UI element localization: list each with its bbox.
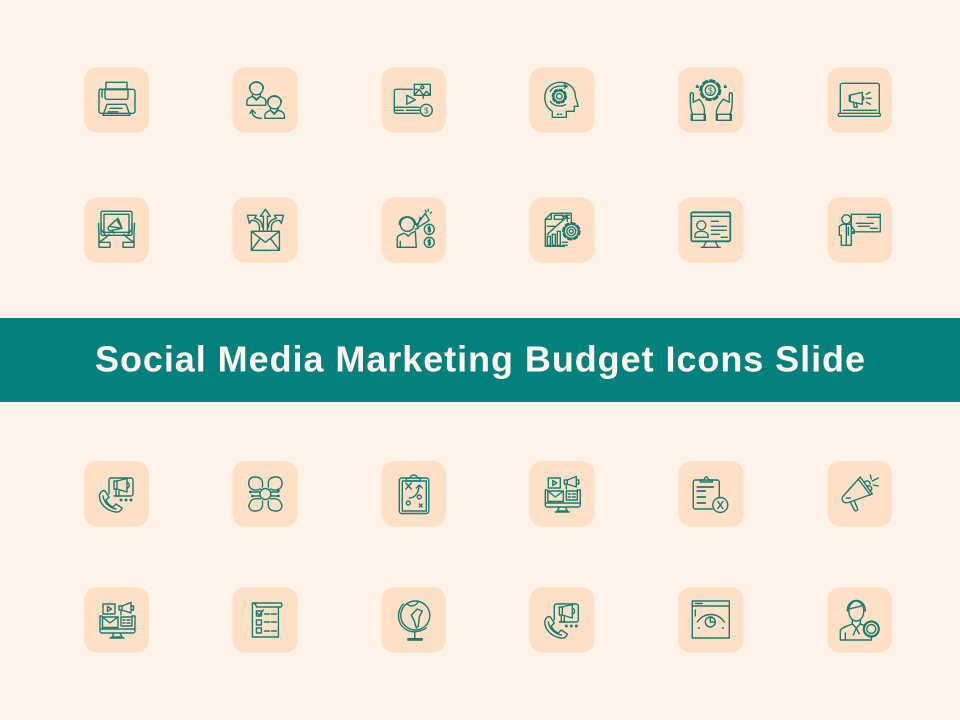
icon: envelope with arrows bbox=[232, 197, 298, 263]
icon: man with gear bbox=[827, 587, 892, 653]
icon: laptop with megaphone bbox=[827, 67, 892, 133]
icon: presenter with board bbox=[827, 197, 892, 263]
icon: person with megaphone and coins bbox=[381, 197, 446, 263]
icon: two people swap bbox=[232, 67, 298, 133]
icon: phone and megaphone bubble 2 bbox=[529, 587, 595, 653]
icon: globe bbox=[381, 587, 446, 653]
icon: monitor with profile bbox=[678, 197, 744, 263]
icon: media screen and megaphone 2 bbox=[84, 587, 149, 653]
icon: megaphone bbox=[827, 461, 892, 527]
icon: video budget: $ bbox=[424, 106, 429, 115]
icon: browser with eye bbox=[678, 587, 744, 653]
icon: printer bbox=[84, 67, 149, 133]
icon: hands holding dollar gear bbox=[678, 67, 744, 133]
icon: video budget bbox=[381, 67, 446, 133]
icon: clipboard strategy bbox=[381, 461, 446, 527]
icon: media screen and megaphone bbox=[529, 461, 595, 527]
icon: tablet in hands bbox=[84, 197, 149, 263]
icon: checklist bbox=[232, 587, 298, 653]
title: Social Media Marketing Budget Icons Slide bbox=[95, 338, 865, 380]
icon: report with chart and gear bbox=[529, 197, 595, 263]
title band bbox=[0, 318, 960, 402]
icon: clipboard with x bbox=[678, 461, 744, 527]
icon: mind map bbox=[232, 461, 298, 527]
icon: hands holding dollar gear: $ bbox=[708, 86, 713, 95]
icon: head with gear bbox=[529, 67, 595, 133]
icon: phone and megaphone bubble bbox=[84, 461, 149, 527]
